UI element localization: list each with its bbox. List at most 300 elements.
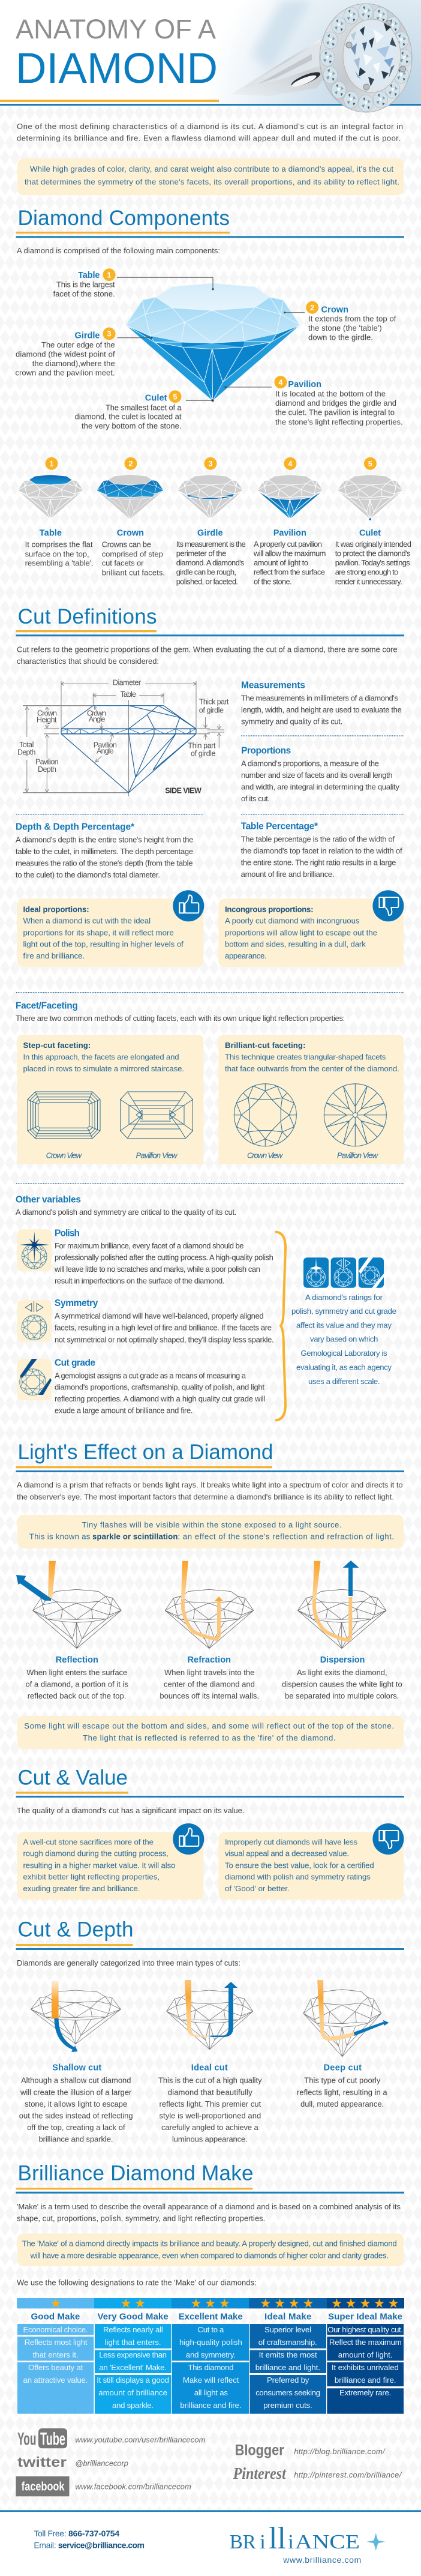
column: Super Ideal Make: Reflect the maximum — [329, 2338, 402, 2347]
social: YouTube — [17, 2428, 206, 2449]
panel: component 3 girdle: polished, or faceted. — [176, 577, 238, 586]
callout: sparkle — [17, 1515, 404, 1548]
light intro: the observer's eye. The most important factors that determine a diamond's brilliance is its ability to reflect light. — [17, 1492, 394, 1501]
website url: www.brilliance.com — [282, 2555, 361, 2565]
diagram: emerald pavilion view — [121, 1092, 193, 1139]
text block: facet/faceting: Facet/Faceting — [16, 1001, 78, 1011]
callout: incongruous proportions: bottom and sides, resulting in a dull, dark — [225, 940, 366, 949]
panel: component 2 crown: comprised of step — [102, 549, 163, 558]
heading: Brilliance Diamond Make: Brilliance Diamond Make — [18, 2162, 253, 2185]
text block: Proportions: of its cut. — [241, 794, 270, 803]
column: Very Good Make: an 'Excellent' Make. — [99, 2363, 167, 2372]
panel: brilliant-cut faceting: Crown View — [247, 1151, 283, 1160]
diagram: brilliant pavilion view — [324, 1084, 386, 1146]
panel: brilliant-cut faceting: Brilliant-cut faceting: — [225, 1041, 306, 1050]
intro text — [17, 122, 403, 142]
component label: Table: 1 — [107, 271, 112, 279]
panel: reflection: of a diamond, a portion of it is — [25, 1680, 128, 1689]
component label: Culet: The smallest facet of a — [106, 403, 182, 412]
callout: ideal proportions: fire and brilliance. — [23, 951, 85, 960]
text block: other variables — [16, 1194, 236, 1217]
callout: incongruous proportions: Incongrous proportions: — [225, 904, 313, 913]
panel: component 5 culet: 5 — [368, 460, 372, 468]
panel: brilliant-cut faceting: This technique creates triangular-shaped facets — [225, 1053, 386, 1062]
social: Pinterest: Pinterest — [233, 2464, 287, 2482]
icon: logo sparkle — [366, 2533, 386, 2551]
heading: Light's Effect — [16, 1440, 404, 1472]
panel: dispersion: be separated into multiple colors. — [285, 1691, 399, 1700]
component label: Table: Table — [78, 271, 100, 280]
column: Super Ideal Make: Extremely rare. — [339, 2388, 391, 2397]
panel: reflection — [16, 1561, 128, 1700]
cut and value intro: The quality of a diamond's cut has a significant impact on its value. — [17, 1806, 244, 1815]
callout: fire: Some light will escape out the bottom and sides, and some will reflect out of the top of the stone. — [24, 1721, 394, 1730]
contact details: 866-737-0754 — [68, 2529, 119, 2538]
column: Excellent Make: This diamond — [188, 2363, 234, 2372]
title — [16, 14, 218, 92]
panel: symmetry: A symmetrical diamond will have well-balanced, properly aligned — [55, 1311, 264, 1320]
header rules — [0, 100, 421, 106]
component label: Table — [53, 268, 214, 298]
column: Ideal Make: Superior level — [264, 2325, 311, 2334]
panel: component 4 pavilion: amount of light to — [254, 558, 308, 567]
panel: symmetry — [17, 1298, 274, 1344]
component label: Pavilion: It is located at the bottom of the — [275, 390, 386, 399]
diagram labels: Thick part — [199, 697, 229, 706]
heading: Cut and Depth: Cut & Depth — [18, 1918, 133, 1942]
main diamond diagram — [126, 283, 300, 401]
heading: Diamond Components — [16, 206, 404, 238]
column: Ideal Make — [249, 2298, 327, 2414]
diagram labels: of girdle — [191, 749, 216, 757]
callout: improper cut value: of 'Good' or better. — [225, 1884, 290, 1893]
panel: brilliant-cut faceting: that face outwards from the center of the diamond. — [225, 1064, 399, 1073]
panel: shallow cut: stone, it allows light to escape — [25, 2099, 127, 2108]
social: Blogger: Blogger — [235, 2442, 284, 2459]
column: Super Ideal Make: brilliance and fire. — [335, 2376, 396, 2385]
column: Ideal Make: consumers seeking — [255, 2388, 320, 2397]
callout: improper cut value: Improperly cut diamonds will have less — [225, 1837, 357, 1846]
diagram labels: Pavilion — [35, 757, 59, 766]
panel: component 2 crown: 2 — [128, 460, 133, 468]
text block: Proportions: and width, are integral in determining the quality — [241, 782, 399, 791]
diagram labels — [17, 679, 229, 795]
panel: polish: For maximum brilliance, every facet of a diamond should be — [55, 1241, 243, 1250]
component label: Girdle: 3 — [107, 330, 112, 339]
callout: well-cut value: rough diamond during the cutting process, — [23, 1849, 169, 1858]
component label: Girdle — [16, 328, 152, 378]
component label: Culet — [74, 390, 214, 430]
column: Excellent Make: Cut to a — [198, 2325, 224, 2334]
panel: ideal cut: This is the cut of a high quality — [158, 2076, 262, 2085]
callout: fire: The light that is reflected is referred to as the 'fire' of the diamond. — [83, 1733, 336, 1742]
text block: Measurements: length, width, and height are used to evaluate the — [241, 705, 402, 714]
panel: component 2 crown — [97, 457, 165, 577]
panel: refraction: bounces off its internal walls. — [160, 1691, 259, 1700]
heading: Cut and Value: Cut & Value — [18, 1766, 128, 1789]
column: Ideal Make: premium cuts. — [263, 2401, 312, 2410]
icon tiles: polish, symmetry, cut grade — [303, 1257, 384, 1288]
panel: component 4 pavilion: of the stone. — [254, 577, 292, 586]
panel: cut grade: Cut grade — [55, 1358, 95, 1368]
panel: shallow cut: brilliance and sparkle. — [38, 2134, 113, 2143]
panel: polish: result in imperfections on the surface of the diamond. — [55, 1276, 224, 1285]
ring illustration — [231, 4, 412, 112]
text block: Measurements: The measurements in millimeters of a diamond's — [241, 693, 398, 702]
light intro — [17, 1481, 403, 1501]
panel: symmetry: Symmetry — [55, 1298, 98, 1308]
panel: component 4 pavilion: Pavilion — [273, 529, 306, 538]
text block: lab ratings: affect its value and they may — [296, 1320, 392, 1329]
social: YouTube: You — [17, 2429, 36, 2449]
panel: component 4 pavilion: 4 — [288, 460, 293, 468]
panel: component 2 crown: Crown — [117, 529, 144, 538]
panel: polish: Polish — [55, 1228, 80, 1238]
panel: polish — [17, 1228, 273, 1285]
panel: symmetry: not symmetrical or not optimally shaped, they'll display less sparkle. — [55, 1335, 274, 1344]
contact details: service@brilliance.com — [58, 2540, 145, 2550]
text block: Proportions: Proportions — [241, 746, 291, 756]
diagram: brilliant crown view — [234, 1084, 296, 1146]
column: Ideal Make: brilliance and light. — [255, 2363, 320, 2372]
social: YouTube: www.youtube.com/user/brilliancecom — [75, 2435, 206, 2444]
panel: ideal cut: luminous appearance. — [172, 2134, 248, 2143]
panel: component 4 pavilion: reflect from the surface — [254, 568, 325, 577]
column: Excellent Make: high-quality polish — [179, 2338, 242, 2347]
text block: Proportions: A diamond's proportions, a measure of the — [241, 759, 379, 768]
panel: component 4 pavilion — [253, 457, 326, 586]
diagram labels: Angle — [89, 715, 106, 723]
component label: Girdle: crown and the pavilion meet. — [16, 369, 115, 378]
side view diagram — [17, 679, 229, 796]
column: Excellent Make: all light as — [194, 2388, 228, 2397]
component label: Culet: the very bottom of the stone. — [82, 421, 182, 430]
panel: step-cut faceting: Step-cut faceting: — [23, 1041, 91, 1050]
panel: component 3 girdle: 3 — [209, 460, 212, 468]
component label: Table: This is the largest — [56, 280, 115, 289]
cut definitions intro — [17, 645, 398, 666]
column: Very Good Make — [94, 2298, 172, 2414]
contact details: Toll Free: — [34, 2529, 67, 2538]
text block: other variables: Other variables — [16, 1194, 81, 1205]
panel: component 5 culet: are strong enough to — [335, 568, 398, 577]
component label: Crown: the stone (the 'table') — [308, 324, 382, 333]
callout: cut importance: While high grades of color, clarity, and carat weight also contribute to a diamond's appeal, it's the cut — [30, 164, 393, 173]
text block: Table Percentage: Table Percentage* — [241, 822, 318, 832]
panel: ideal cut: reflects light. This premier cut — [160, 2099, 261, 2108]
panel: component 5 culet: It was originally intended — [335, 540, 411, 549]
panel: brilliant-cut faceting: Pavillion View — [337, 1151, 378, 1160]
text block: Table Percentage: the entire stone. The right ratio results in a large — [241, 858, 396, 867]
diagram labels: Table — [121, 690, 136, 699]
social: Blogger — [235, 2442, 386, 2459]
callout: sparkle: Tiny flashes will be visible within the stone exposed to a light source. — [82, 1520, 342, 1529]
text block: other variables: A diamond's polish and symmetry are critical to the quality of its cut. — [16, 1208, 236, 1217]
panel: refraction — [160, 1561, 259, 1700]
panel: component 5 culet: render it unnecessary. — [335, 577, 402, 586]
panel: shallow cut: off the top, creating a lack of — [27, 2123, 125, 2132]
text block: lab ratings: A diamond's ratings for — [305, 1293, 383, 1302]
panel: component 2 crown: cut facets or — [102, 559, 144, 568]
logo: Brilliance: i — [288, 2531, 294, 2553]
footer rule — [0, 2510, 421, 2512]
heading: Brilliance Diamond Make — [16, 2162, 404, 2194]
icon: polish — [17, 1229, 52, 1271]
text block: Proportions: number and size of facets and its overall length — [241, 771, 392, 780]
panel: shallow cut — [19, 1981, 133, 2143]
panel: component 1 table: Table — [40, 529, 62, 538]
text block: Measurements: Measurements — [241, 681, 305, 691]
column: Super Ideal Make: amount of light. — [338, 2350, 392, 2359]
diagram labels: of girdle — [199, 706, 224, 714]
panel: ideal cut: Ideal cut — [191, 2063, 228, 2072]
text block: Table Percentage: amount of fire and brilliance. — [241, 870, 334, 879]
component label: Crown: 2 — [310, 304, 314, 312]
callout: ideal proportions: Ideal proportions: — [23, 904, 89, 913]
callout: well-cut value: exuding greater fire and brilliance. — [23, 1884, 140, 1893]
column: Good Make: Good Make — [31, 2311, 80, 2322]
text block: lab ratings: evaluating it, as each agency — [296, 1362, 392, 1371]
callout: improper cut value — [218, 1823, 404, 1900]
callout: incongruous proportions — [218, 890, 404, 967]
column: Ideal Make: of craftsmanship. — [258, 2338, 317, 2347]
panel: step-cut faceting: In this approach, the facets are elongated and — [23, 1053, 179, 1062]
diagram labels: SIDE VIEW — [165, 786, 202, 795]
text block: lab ratings: polish, symmetry and cut grade — [291, 1307, 396, 1316]
component label: Crown: It extends from the top of — [308, 314, 396, 323]
column: Good Make — [17, 2298, 94, 2414]
logo: Brilliance: i — [260, 2531, 266, 2553]
callout: ideal proportions: light out of the top, resulting in higher levels of — [23, 940, 184, 949]
column: Excellent Make: Excellent Make — [179, 2311, 243, 2322]
panel: component 3 girdle: Girdle — [197, 529, 223, 538]
logo: Brilliance: ANCE — [295, 2531, 360, 2553]
contact details — [34, 2529, 145, 2550]
make intro: shape, cut, proportions, polish, symmetry, and light reflecting properties. — [17, 2213, 265, 2222]
diagram labels: Depth — [17, 748, 36, 757]
panel: refraction: center of the diamond and — [164, 1680, 255, 1689]
panel: component 3 girdle: girdle can be rough, — [176, 568, 236, 577]
social: Pinterest: http://pinterest.com/brilliance/ — [294, 2470, 402, 2479]
column: Good Make: Reflects most light — [25, 2338, 88, 2347]
panel: step-cut faceting: Pavillion View — [136, 1151, 178, 1160]
component label: Crown: down to the girdle. — [308, 333, 373, 342]
component label: Culet: Culet — [145, 393, 167, 403]
icon: thumbs down — [372, 1823, 404, 1855]
column: Good Make: that enters it. — [33, 2350, 79, 2359]
component label: Culet: diamond, the culet is located at — [74, 412, 182, 421]
callout: improper cut value: To ensure the best value, look for a certified — [225, 1861, 374, 1870]
panel: step-cut faceting: Crown View — [46, 1151, 82, 1160]
component label: Pavilion: the stone's light reflecting properties. — [275, 417, 403, 426]
callout: cut importance — [17, 158, 404, 195]
callout: well-cut value: exhibit better light reflecting properties, — [23, 1873, 160, 1882]
panel: component 5 culet — [335, 457, 411, 586]
column: Super Ideal Make: Our highest quality cut. — [327, 2325, 403, 2334]
social: Twitter — [17, 2454, 128, 2470]
column: Super Ideal Make: Super Ideal Make — [328, 2311, 402, 2322]
callout: make importance: The 'Make' of a diamond directly impacts its brilliance and beauty. A properly designed, cut and finished diamond — [22, 2239, 397, 2248]
heading: Cut and Value — [16, 1766, 404, 1798]
panel: polish: professionally polished after the cutting process. A high-quality polish — [55, 1253, 273, 1262]
panel: component 3 girdle: Its measurement is the — [176, 540, 246, 549]
text block: lab ratings: uses a different scale. — [308, 1377, 380, 1386]
panel: ideal cut: style is well-proportioned and — [160, 2111, 261, 2120]
panel: dispersion: As light exits the diamond, — [297, 1668, 387, 1677]
heading: Cut Definitions: Cut Definitions — [18, 605, 157, 628]
callout: well-cut value: resulting in a higher market value. It will also — [23, 1861, 175, 1870]
text block: Depth and Depth Percentage: A diamond's depth is the entire stone's height from the — [16, 835, 193, 844]
column: Very Good Make: light that enters. — [105, 2338, 161, 2347]
panel: ideal cut — [158, 1980, 262, 2143]
diagram labels: Diameter — [113, 679, 141, 687]
panel: component 1 table — [17, 457, 94, 568]
social: Facebook — [16, 2476, 191, 2496]
callout: incongruous proportions: appearance. — [225, 951, 267, 960]
social: Twitter: twitter — [17, 2454, 67, 2470]
panel: component 1 table: resembling a 'table'. — [25, 559, 94, 568]
panel: component 1 table: It comprises the flat — [25, 540, 93, 549]
title: ANATOMY OF A — [16, 14, 216, 44]
component label: Crown: Crown — [321, 305, 348, 315]
icon: thumbs down — [372, 890, 404, 921]
component label: Pavilion: diamond and bridges the girdle and — [275, 399, 396, 408]
callout: incongruous proportions: A poorly cut diamond with incongruous — [225, 916, 360, 925]
panel: deep cut — [297, 1980, 389, 2108]
icon: thumbs up — [173, 1823, 204, 1855]
panel: cut grade: exude a large amount of brilliance and fire. — [55, 1406, 193, 1415]
component label: Pavilion: the culet. The pavilion is integral to — [275, 408, 395, 417]
panel: cut grade — [17, 1358, 265, 1415]
text block: Table Percentage: the diamond's top facet in relation to the width of — [241, 846, 402, 855]
column: Excellent Make: brilliance and fire. — [180, 2401, 241, 2410]
diagram labels: Depth — [38, 765, 56, 774]
diagram labels: Total — [19, 741, 34, 749]
text block: lab ratings — [291, 1293, 396, 1386]
panel: shallow cut: will create the illusion of a larger — [20, 2087, 132, 2096]
column: Super Ideal Make — [327, 2298, 404, 2414]
column: Very Good Make: Reflects nearly all — [103, 2325, 163, 2334]
header banner — [0, 0, 421, 112]
diagram labels: Pavilion — [94, 741, 117, 750]
text block: facet/faceting: There are two common methods of cutting facets, each with its own unique light reflection properties: — [16, 1014, 345, 1023]
social: Pinterest — [233, 2464, 402, 2482]
column: Very Good Make: It still displays a good — [97, 2376, 169, 2385]
social: Facebook: facebook — [22, 2480, 65, 2493]
panel: dispersion: Dispersion — [320, 1655, 365, 1665]
panel: step-cut faceting: placed in rows to simulate a mirrored staircase. — [23, 1064, 184, 1073]
title: DIAMOND — [16, 45, 218, 92]
panel: reflection: Reflection — [56, 1655, 98, 1665]
callout: ideal proportions — [17, 890, 204, 967]
panel: component 4 pavilion: will allow the maximum — [253, 549, 326, 558]
callout: ideal proportions: When a diamond is cut with the ideal — [23, 916, 151, 925]
panel: component 4 pavilion: A properly cut pavilion — [254, 540, 322, 549]
callout: cut importance: that determines the symmetry of the stone's facets, its overall proportions, and its ability to reflect light. — [25, 178, 399, 187]
social: Twitter: @brilliancecorp — [75, 2459, 128, 2468]
column: Ideal Make: It emits the most — [259, 2350, 317, 2359]
components intro: A diamond is comprised of the following main components: — [17, 246, 220, 255]
panel: deep cut: Deep cut — [324, 2063, 362, 2072]
column: Ideal Make: Ideal Make — [264, 2311, 311, 2322]
callout: sparkle: sparkle or scintillation — [92, 1532, 178, 1541]
panel: cut grade: A gemologist assigns a cut grade as a means of measuring a — [55, 1371, 246, 1380]
column: Very Good Make: Very Good Make — [97, 2311, 169, 2322]
diagram labels: Height — [37, 715, 57, 724]
column: Very Good Make: amount of brilliance — [98, 2388, 167, 2397]
column: Excellent Make — [172, 2298, 249, 2414]
intro text: One of the most defining characteristics of a diamond is its cut. A diamond's cut is an integral factor in — [17, 122, 403, 131]
diamond profile — [61, 706, 196, 793]
panel: shallow cut: Shallow cut — [52, 2063, 101, 2072]
logo: Brilliance: BR — [230, 2531, 256, 2553]
component label: Table: facet of the stone. — [53, 289, 115, 298]
panel: component 2 crown: brilliant cut facets. — [102, 568, 165, 577]
rating table — [17, 2298, 404, 2414]
text block: Table Percentage — [241, 822, 402, 879]
callout: well-cut value: A well-cut stone sacrifices more of the — [23, 1837, 154, 1846]
panel: component 2 crown: Crowns can be — [102, 540, 151, 549]
panel: reflection: reflected back out of the top. — [28, 1691, 126, 1700]
column: Excellent Make: Make will reflect — [183, 2376, 239, 2385]
panel: step-cut faceting — [17, 1035, 203, 1164]
callout: make importance — [17, 2233, 404, 2266]
panel: component 3 girdle: perimeter of the — [176, 549, 226, 558]
panel: ideal cut: carefully angled to achieve a — [161, 2123, 258, 2132]
panel: cut grade: diamond's proportions, craftsmanship, quality of polish, and light — [55, 1383, 264, 1392]
social: YouTube: Tube — [40, 2429, 65, 2449]
dimension lines — [23, 681, 224, 796]
panel: deep cut: This type of cut poorly — [304, 2076, 381, 2085]
icon: cut grade — [17, 1359, 52, 1400]
brace — [275, 1232, 285, 1420]
column: Very Good Make: and sparkle. — [112, 2401, 154, 2410]
component label: Girdle: diamond (the widest point of — [16, 349, 115, 358]
text block: facet/faceting — [16, 1001, 345, 1023]
callout: ideal proportions: proportions for its shape, it will reflect more — [23, 928, 174, 937]
designations intro: We use the following designations to rate the 'Make' of our diamonds: — [17, 2278, 257, 2287]
component label: Girdle: Girdle — [74, 331, 100, 340]
text block: Measurements: symmetry and quality of its cut. — [241, 717, 342, 726]
panel: shallow cut: out the sides instead of reflecting — [19, 2111, 133, 2120]
heading: Diamond Components: Diamond Components — [18, 206, 230, 230]
component label: Girdle: the diamond),where the — [32, 359, 115, 368]
component label: Crown — [284, 301, 396, 342]
diagram labels: Crown — [87, 709, 106, 717]
make intro — [17, 2202, 401, 2222]
contact details: Email: — [34, 2540, 56, 2550]
column: Good Make: Offers beauty at — [28, 2363, 83, 2372]
panel: dispersion: dispersion causes the white light to — [282, 1680, 402, 1689]
text block: Measurements — [241, 681, 402, 726]
diagram labels: Angle — [97, 747, 113, 756]
panel: component 3 girdle — [176, 457, 246, 586]
panel: component 3 girdle: diamond. A diamond's — [176, 558, 245, 567]
callout: well-cut value — [17, 1823, 204, 1900]
text block: Depth and Depth Percentage: Depth & Depth Percentage* — [16, 822, 135, 832]
panel: refraction: Refraction — [187, 1655, 231, 1665]
column: Very Good Make: Less expensive than — [99, 2350, 167, 2359]
cut and depth intro: Diamonds are generally categorized into three main types of cuts: — [17, 1958, 240, 1967]
diagram: emerald crown view — [28, 1092, 100, 1139]
text block: Table Percentage: The table percentage is the ratio of the width of — [241, 835, 395, 844]
text block: lab ratings: vary based on which — [310, 1335, 378, 1344]
panel: ideal cut: diamond that beautifully — [168, 2087, 252, 2096]
diagram labels: Crown — [37, 709, 57, 718]
panel: deep cut: reflects light, resulting in a — [297, 2087, 387, 2096]
column: Excellent Make: and symmetry. — [186, 2350, 236, 2359]
cut definitions intro: Cut refers to the geometric proportions of the gem. When evaluating the cut of a diamond, there are some core — [17, 645, 398, 654]
